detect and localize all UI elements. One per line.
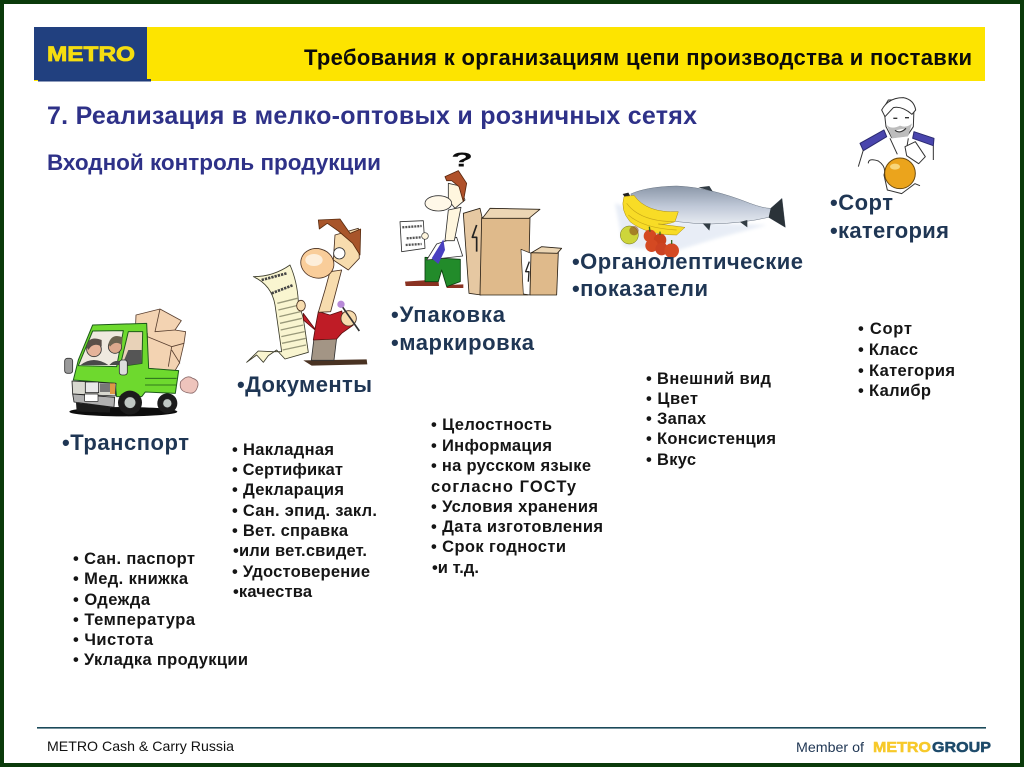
icon: truck xyxy=(65,309,198,416)
logo: METRO: METRO xyxy=(47,43,135,66)
list: transport: • Сан. паспорт xyxy=(73,550,195,568)
list: packaging: • Целостность xyxy=(431,416,552,434)
list: grade: • Калибр xyxy=(858,382,931,400)
footer: member of METRO GROUP: GROUP xyxy=(932,739,991,756)
footer: member of METRO GROUP: Member of xyxy=(796,739,864,755)
icon: inspector with orange xyxy=(858,98,934,194)
header banner xyxy=(34,27,985,82)
panel: organoleptic label: •показатели xyxy=(572,276,708,301)
list: documents: • Удостоверение xyxy=(232,563,370,581)
panel: grade label: •категория xyxy=(830,218,949,243)
footer: member of METRO GROUP: METRO xyxy=(873,739,931,756)
list: transport xyxy=(73,550,248,669)
list: documents: • Накладная xyxy=(232,441,334,459)
panel: documents label: •Документы xyxy=(237,372,372,397)
list: organoleptic: • Консистенция xyxy=(646,430,776,448)
list: packaging: •и т.д. xyxy=(432,559,479,577)
list: grade: • Сорт xyxy=(858,320,912,338)
list: grade: • Категория xyxy=(858,362,955,380)
list: transport: • Укладка продукции xyxy=(73,651,248,669)
list: documents: • Вет. справка xyxy=(232,522,349,540)
subheading: Входной контроль продукции xyxy=(47,150,381,175)
icon: fish and fruit xyxy=(615,186,785,258)
footer: company name: METRO Cash & Carry Russia xyxy=(47,738,234,754)
icon: man checking boxes xyxy=(400,149,562,295)
list: documents: •или вет.свидет. xyxy=(233,542,367,560)
list: grade xyxy=(858,320,955,400)
list: packaging: согласно ГОСТу xyxy=(431,478,577,496)
panel: organoleptic label xyxy=(572,249,803,301)
list: packaging: • Условия хранения xyxy=(431,498,598,516)
list: organoleptic xyxy=(646,370,776,469)
icon: man with document scroll xyxy=(247,219,367,366)
panel: packaging label xyxy=(391,302,535,355)
icon: man checking boxes: ? xyxy=(451,149,473,172)
list: documents: • Сан. эпид. закл. xyxy=(232,502,377,520)
list: packaging: • Информация xyxy=(431,437,552,455)
banner title: Требования к организациям цепи производства и поставки xyxy=(304,45,972,70)
list: documents: • Сертификат xyxy=(232,461,343,479)
list: transport: • Мед. книжка xyxy=(73,570,189,588)
panel: packaging label: •маркировка xyxy=(391,330,535,355)
list: documents: •качества xyxy=(233,583,313,601)
list: organoleptic: • Цвет xyxy=(646,390,698,408)
list: documents xyxy=(232,441,377,601)
list: packaging: • Дата изготовления xyxy=(431,518,603,536)
panel: grade label xyxy=(830,190,949,243)
footer: member of METRO GROUP xyxy=(796,739,991,756)
panel: organoleptic label: •Органолептические xyxy=(572,249,803,274)
list: transport: • Температура xyxy=(73,611,196,629)
panel: packaging label: •Упаковка xyxy=(391,302,506,327)
panel: grade label: •Сорт xyxy=(830,190,893,215)
panel: transport label: •Транспорт xyxy=(62,430,189,455)
list: organoleptic: • Внешний вид xyxy=(646,370,772,388)
list: grade: • Класс xyxy=(858,341,918,359)
list: transport: • Чистота xyxy=(73,631,154,649)
heading: 7. Реализация в мелко-оптовых и розничных сетях xyxy=(47,102,697,130)
list: packaging xyxy=(431,416,603,577)
list: packaging: • на русском языке xyxy=(431,457,591,475)
list: organoleptic: • Запах xyxy=(646,410,707,428)
list: documents: • Декларация xyxy=(232,481,344,499)
list: organoleptic: • Вкус xyxy=(646,451,696,469)
list: packaging: • Срок годности xyxy=(431,538,566,556)
list: transport: • Одежда xyxy=(73,591,151,609)
